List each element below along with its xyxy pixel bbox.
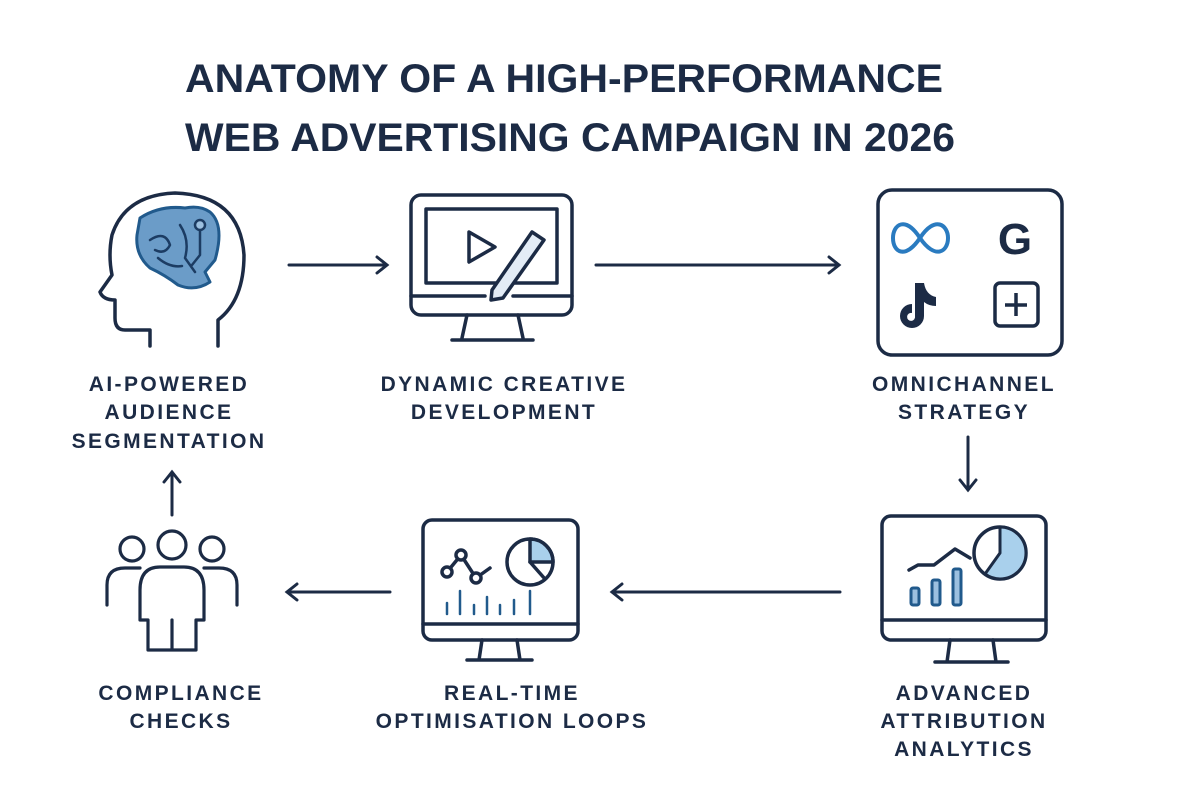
label: AI-powered audience segmentation: AI-POWERED xyxy=(89,373,249,396)
icon: monitor with play and pen xyxy=(411,195,572,340)
icon: google G: G xyxy=(998,215,1032,264)
label: compliance checks: CHECKS xyxy=(129,710,233,733)
icon: tiktok xyxy=(900,283,936,328)
arrow: optimisation to compliance xyxy=(287,584,390,600)
icon: AI head with brain xyxy=(100,193,244,346)
label: real-time optimisation loops xyxy=(376,682,648,733)
label: dynamic creative development xyxy=(381,373,627,424)
label: advanced attribution analytics: ANALYTICS xyxy=(894,738,1034,761)
title xyxy=(185,57,955,160)
label: dynamic creative development: DYNAMIC CREATIVE xyxy=(381,373,627,396)
icon: omnichannel platforms box xyxy=(878,190,1062,355)
label: advanced attribution analytics: ADVANCED xyxy=(896,682,1032,705)
arrow: up xyxy=(164,472,180,515)
label: omnichannel strategy: STRATEGY xyxy=(898,401,1030,424)
arrow: analytics to optimisation xyxy=(612,584,840,600)
label: compliance checks: COMPLIANCE xyxy=(98,682,264,705)
label: compliance checks xyxy=(98,682,264,733)
label: AI-powered audience segmentation: AUDIENCE xyxy=(105,401,233,424)
label: AI-powered audience segmentation xyxy=(72,373,266,453)
label: real-time optimisation loops: OPTIMISATION LOOPS xyxy=(376,710,648,733)
icon: plus box xyxy=(995,283,1038,326)
label: advanced attribution analytics: ATTRIBUTION xyxy=(880,710,1048,733)
title: ANATOMY OF A HIGH-PERFORMANCE xyxy=(185,57,943,101)
label: AI-powered audience segmentation: SEGMENTATION xyxy=(72,430,266,453)
label: omnichannel strategy xyxy=(872,373,1056,424)
arrow: segmentation to creative xyxy=(289,257,387,273)
label: advanced attribution analytics xyxy=(880,682,1048,761)
title: WEB ADVERTISING CAMPAIGN IN 2026 xyxy=(185,116,955,160)
icon: people group xyxy=(107,531,237,650)
label: omnichannel strategy: OMNICHANNEL xyxy=(872,373,1056,396)
icon: meta logo xyxy=(893,224,948,252)
icon: analytics monitor xyxy=(882,516,1046,662)
label: dynamic creative development: DEVELOPMENT xyxy=(411,401,597,424)
arrow: down xyxy=(960,437,976,490)
label: real-time optimisation loops: REAL-TIME xyxy=(444,682,580,705)
icon: realtime optimisation monitor xyxy=(423,520,578,660)
arrow: creative to omnichannel xyxy=(596,257,839,273)
